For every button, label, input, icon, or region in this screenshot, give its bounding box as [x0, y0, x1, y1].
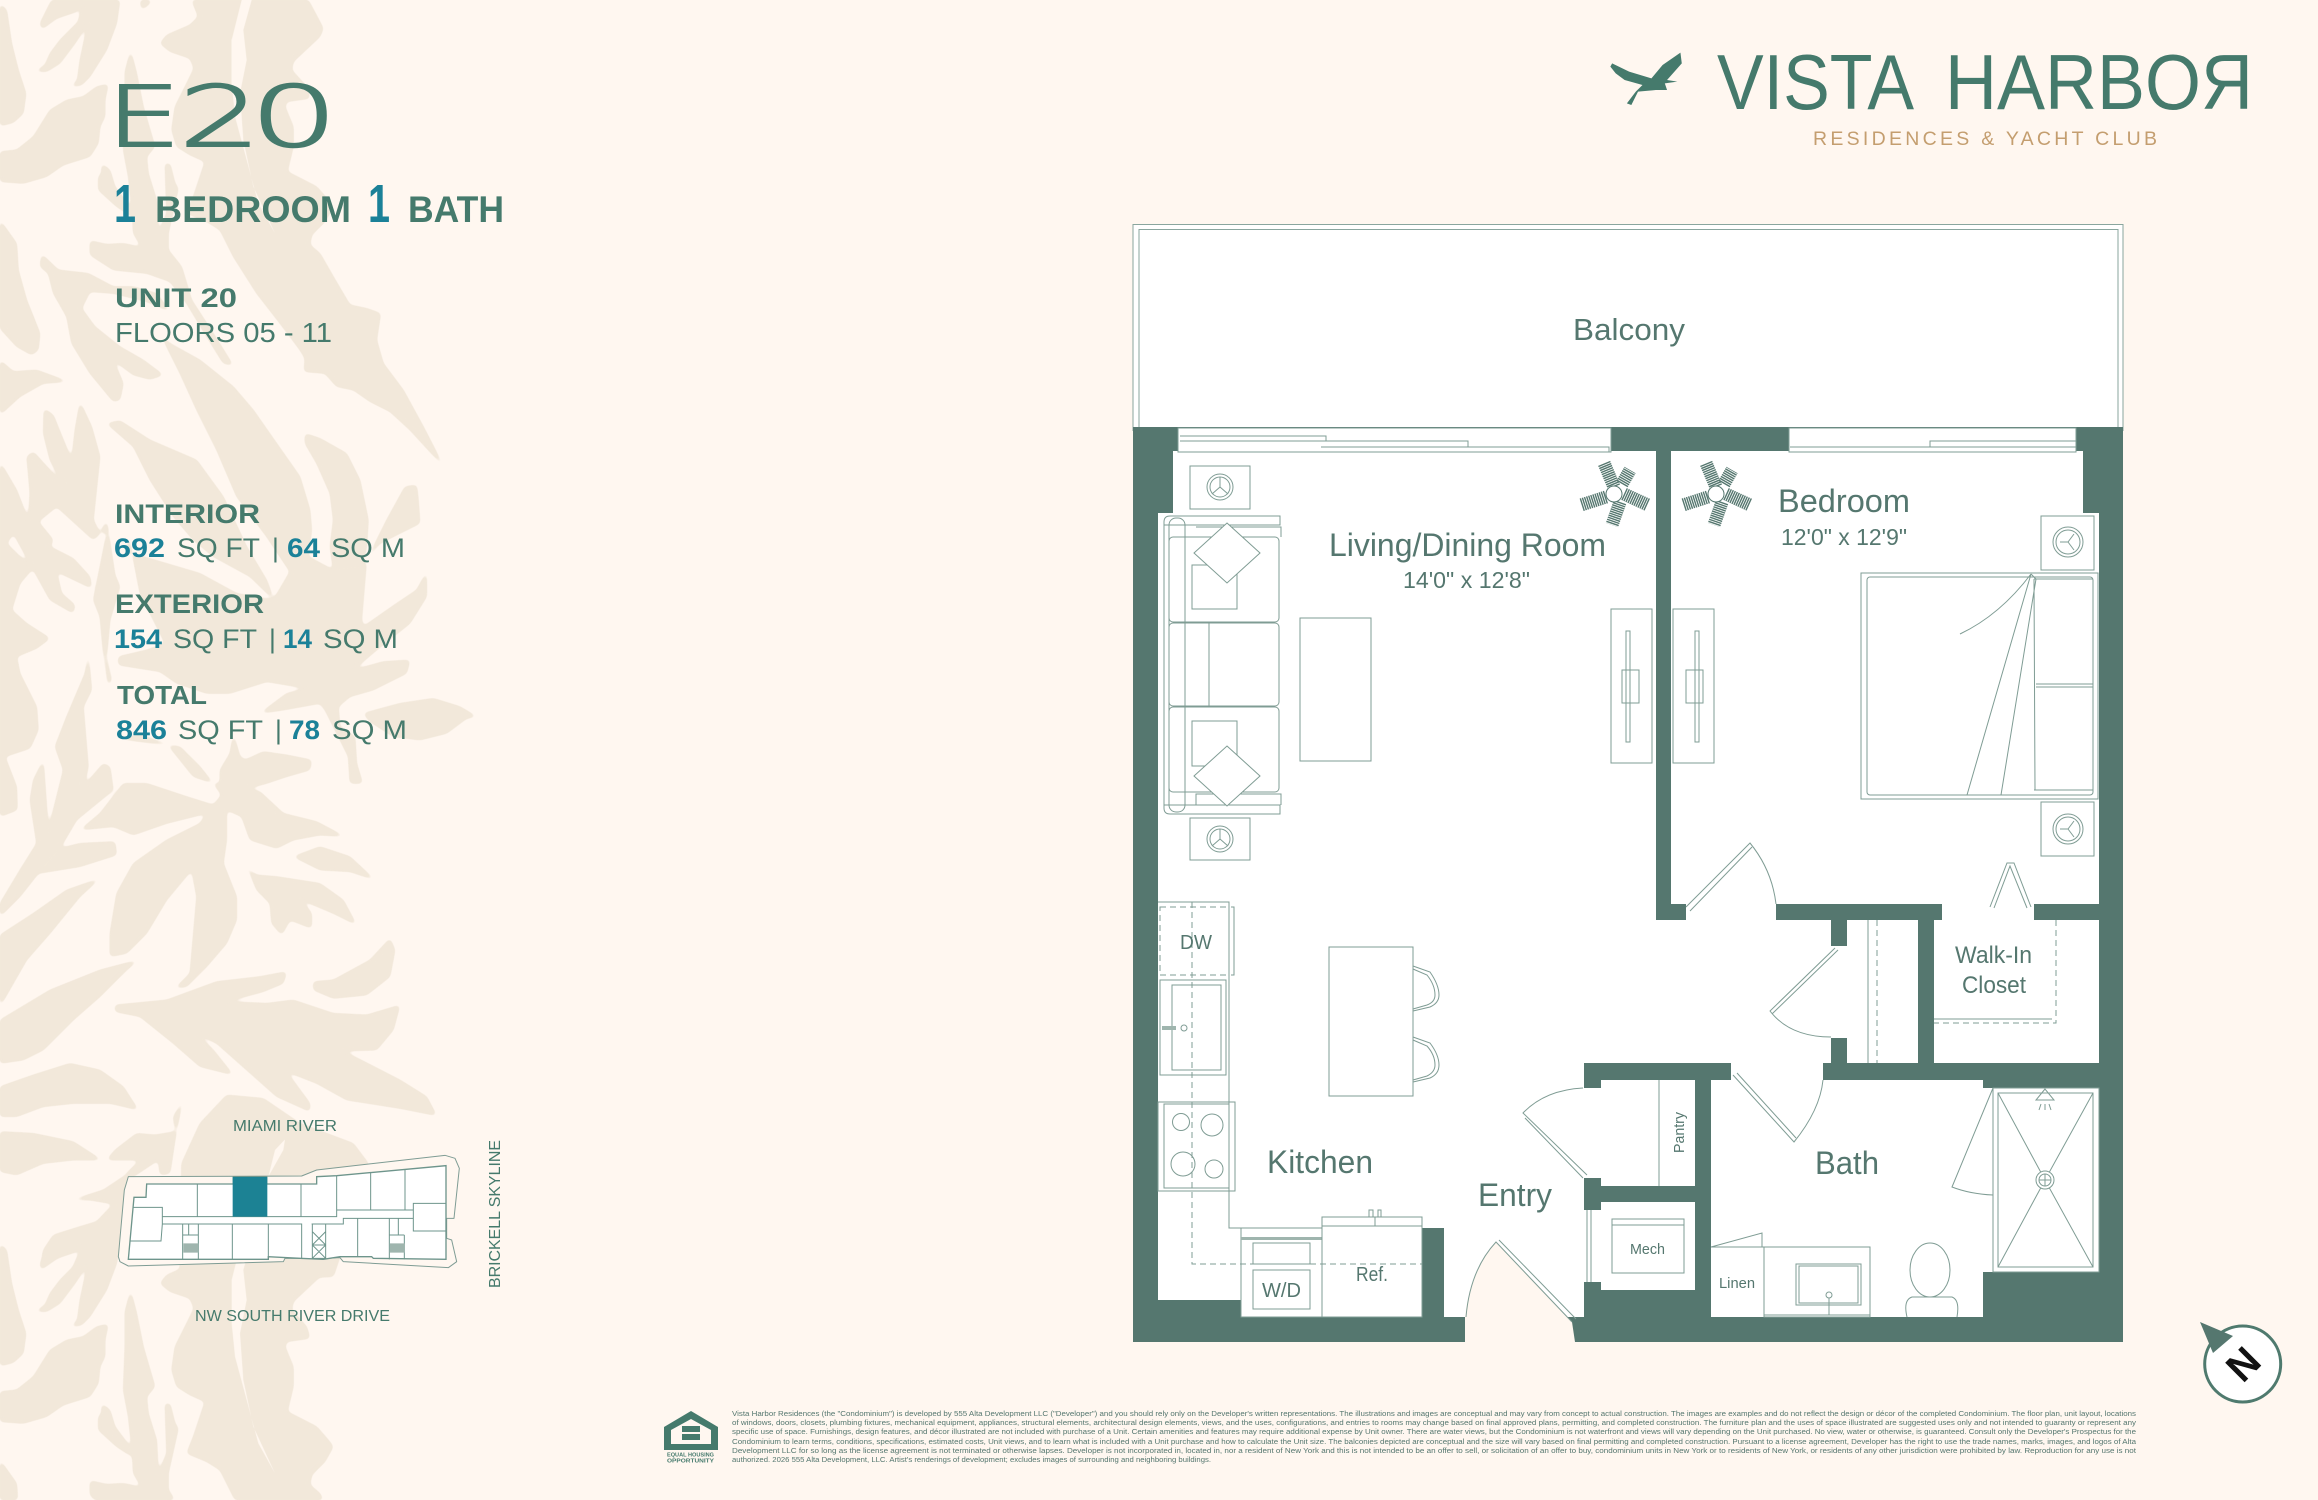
key plan: highlighted unit [233, 1177, 267, 1217]
unit and floors [115, 283, 332, 348]
exterior area: SQ FT [173, 624, 257, 654]
room labels: Bedroom [1778, 483, 1910, 519]
key plan labels: BRICKELL SKYLINE [487, 1140, 504, 1288]
exterior area: EXTERIOR [115, 589, 264, 619]
legal disclaimer: authorized. 2026 555 Alta Development, LLC. Artist's renderings of development; excludes images of surrounding and neighboring buildings. [732, 1455, 1211, 1464]
logo: wordmark: HARBOЯ [1945, 38, 2253, 126]
exterior area: 14 [283, 624, 312, 654]
total area: SQ M [332, 715, 407, 745]
balcony: Balcony [1573, 312, 1685, 347]
room labels: Walk-In [1955, 942, 2032, 969]
balcony [1133, 224, 2123, 430]
plant: bedroom [1683, 463, 1750, 525]
logo: wordmark: VISTA [1717, 38, 1914, 126]
key plan labels: NW SOUTH RIVER DRIVE [195, 1308, 390, 1325]
entry door swing [1465, 1242, 1575, 1342]
background leaf pattern [0, 0, 477, 1500]
exterior area: | [269, 624, 276, 654]
key plan: building map [118, 1155, 459, 1268]
room labels: 12'0" x 12'9" [1781, 524, 1907, 550]
interior area: 692 [114, 533, 165, 563]
total area: TOTAL [117, 680, 207, 710]
total area: 78 [289, 715, 320, 745]
unit and floors: UNIT 20 [115, 283, 237, 313]
room labels: Ref. [1356, 1264, 1388, 1286]
window: living room sliders [1178, 428, 1611, 452]
title: unit code: E [106, 68, 181, 166]
room floors [1158, 451, 2099, 1317]
heading: bedrooms and baths: 1 [368, 174, 390, 234]
window: bedroom sliders [1789, 428, 2076, 452]
doors and closets [1466, 843, 2056, 1322]
interior area: 64 [287, 533, 320, 563]
coffee table [1300, 618, 1371, 761]
legal disclaimer: specific use of space. Furnishings, design features, and décor illustrated are not included with purchase of a Unit. Certain amenities and features may require additional expense by Unit owner. There are water views, but the Condominium is not waterfront and views will vary depending on the Unit purchased. No view, water or otherwise, is guaranteed. Consult only the Developer's Prospectus for the [732, 1427, 2136, 1436]
key plan labels: MIAMI RIVER [233, 1118, 337, 1135]
exterior area: 154 [114, 624, 162, 654]
total area [116, 680, 407, 745]
room labels: Closet [1962, 972, 2026, 999]
room labels: Kitchen [1267, 1144, 1373, 1180]
heading: bedrooms and baths: BEDROOM [155, 189, 351, 230]
logo: heron bird [1610, 53, 1682, 105]
legal disclaimer: Condominium to learn terms, conditions, specifications, estimated costs, Unit views, and to learn what is included with a Unit purchase and how to calculate the Unit size. The balconies depicted are conceptual and the size will vary based on final permitting and completed construction. Pursuant to a license agreement, Developer has the right to use the trade names, marks, images, and logos of Alta [732, 1437, 2137, 1446]
room labels [1180, 483, 2032, 1302]
bath fixtures [1711, 1088, 2099, 1317]
logo: wordmark: RESIDENCES & YACHT CLUB [1813, 128, 2157, 150]
interior area: SQ M [331, 533, 405, 563]
room labels: W/D [1262, 1280, 1301, 1302]
compass: north arrow [2200, 1322, 2281, 1402]
side tables [1190, 466, 1250, 860]
kitchen counters and appliances [1158, 902, 1422, 1317]
bed [1861, 573, 2098, 799]
compass: north arrow: N [2218, 1339, 2269, 1390]
floor plan [1133, 224, 2123, 1342]
interior area: | [272, 533, 279, 563]
room labels: Living/Dining Room [1329, 527, 1606, 563]
interior area [114, 499, 405, 563]
room labels: Mech [1630, 1241, 1665, 1258]
title: unit code [106, 68, 338, 166]
equal housing opportunity logo: EQUAL HOUSING [667, 1452, 714, 1458]
title: unit code: 2 [179, 68, 261, 166]
equal housing opportunity logo: OPPORTUNITY [667, 1458, 714, 1464]
total area: 846 [116, 715, 167, 745]
heading: bedrooms and baths [114, 174, 504, 234]
room labels: DW [1180, 932, 1212, 954]
total area: | [275, 715, 282, 745]
logo: wordmark [1717, 38, 2253, 150]
media consoles [1611, 609, 1714, 763]
plant: living room [1581, 463, 1648, 525]
room labels: Entry [1478, 1177, 1552, 1213]
kitchen island and stools [1329, 947, 1439, 1096]
unit and floors: FLOORS 05 - 11 [115, 317, 332, 348]
heading: bedrooms and baths: 1 [114, 174, 136, 234]
key plan labels [195, 1118, 504, 1325]
room labels: Linen [1719, 1275, 1755, 1292]
room labels: Bath [1815, 1145, 1879, 1181]
exterior area: SQ M [323, 624, 398, 654]
total area: SQ FT [178, 715, 263, 745]
room labels: 14'0" x 12'8" [1403, 567, 1530, 593]
equal housing opportunity logo [664, 1411, 718, 1464]
title: unit code: 0 [250, 68, 338, 166]
room labels: Pantry [1671, 1112, 1688, 1153]
bedroom side tables [2041, 516, 2094, 856]
legal disclaimer [732, 1409, 2137, 1464]
legal disclaimer: of windows, doors, closets, plumbing fixtures, mechanical equipment, appliances, structural elements, architectural design elements, views, and the uses, configurations, and entries to rooms may change based on final approved plans, permitting, and completed construction. The furniture plan and the uses of space illustrated are suggested uses only and not intended to guaranty or represent any [732, 1418, 2136, 1427]
interior area: INTERIOR [115, 499, 260, 529]
walls [1133, 427, 2123, 1342]
heading: bedrooms and baths: BATH [408, 189, 504, 230]
living room furniture: sofa [1164, 516, 1281, 814]
legal disclaimer: Development LLC for so long as the license agreement is not terminated or otherwise lapses. Developer is not incorporated in, located in, nor a resident of New York and this is not intended to be an offer to sell, or solicitation of an offer to buy, condominium units in New York or to residents of New York, or residents of any other jurisdiction were prohibited by law. Reproduction for any use is not [732, 1446, 2137, 1455]
interior area: SQ FT [177, 533, 260, 563]
legal disclaimer: Vista Harbor Residences (the "Condominium") is developed by 555 Alta Development LLC ("Developer") and you should rely only on the Developer's written representations. The illustrations and images are conceptual and may vary from concept to actual construction. The images are examples and do not reflect the design or décor of the completed Condominium. The floor plan, unit layout, locations [732, 1409, 2136, 1418]
exterior area [114, 589, 398, 654]
mechanical unit [1612, 1219, 1684, 1273]
